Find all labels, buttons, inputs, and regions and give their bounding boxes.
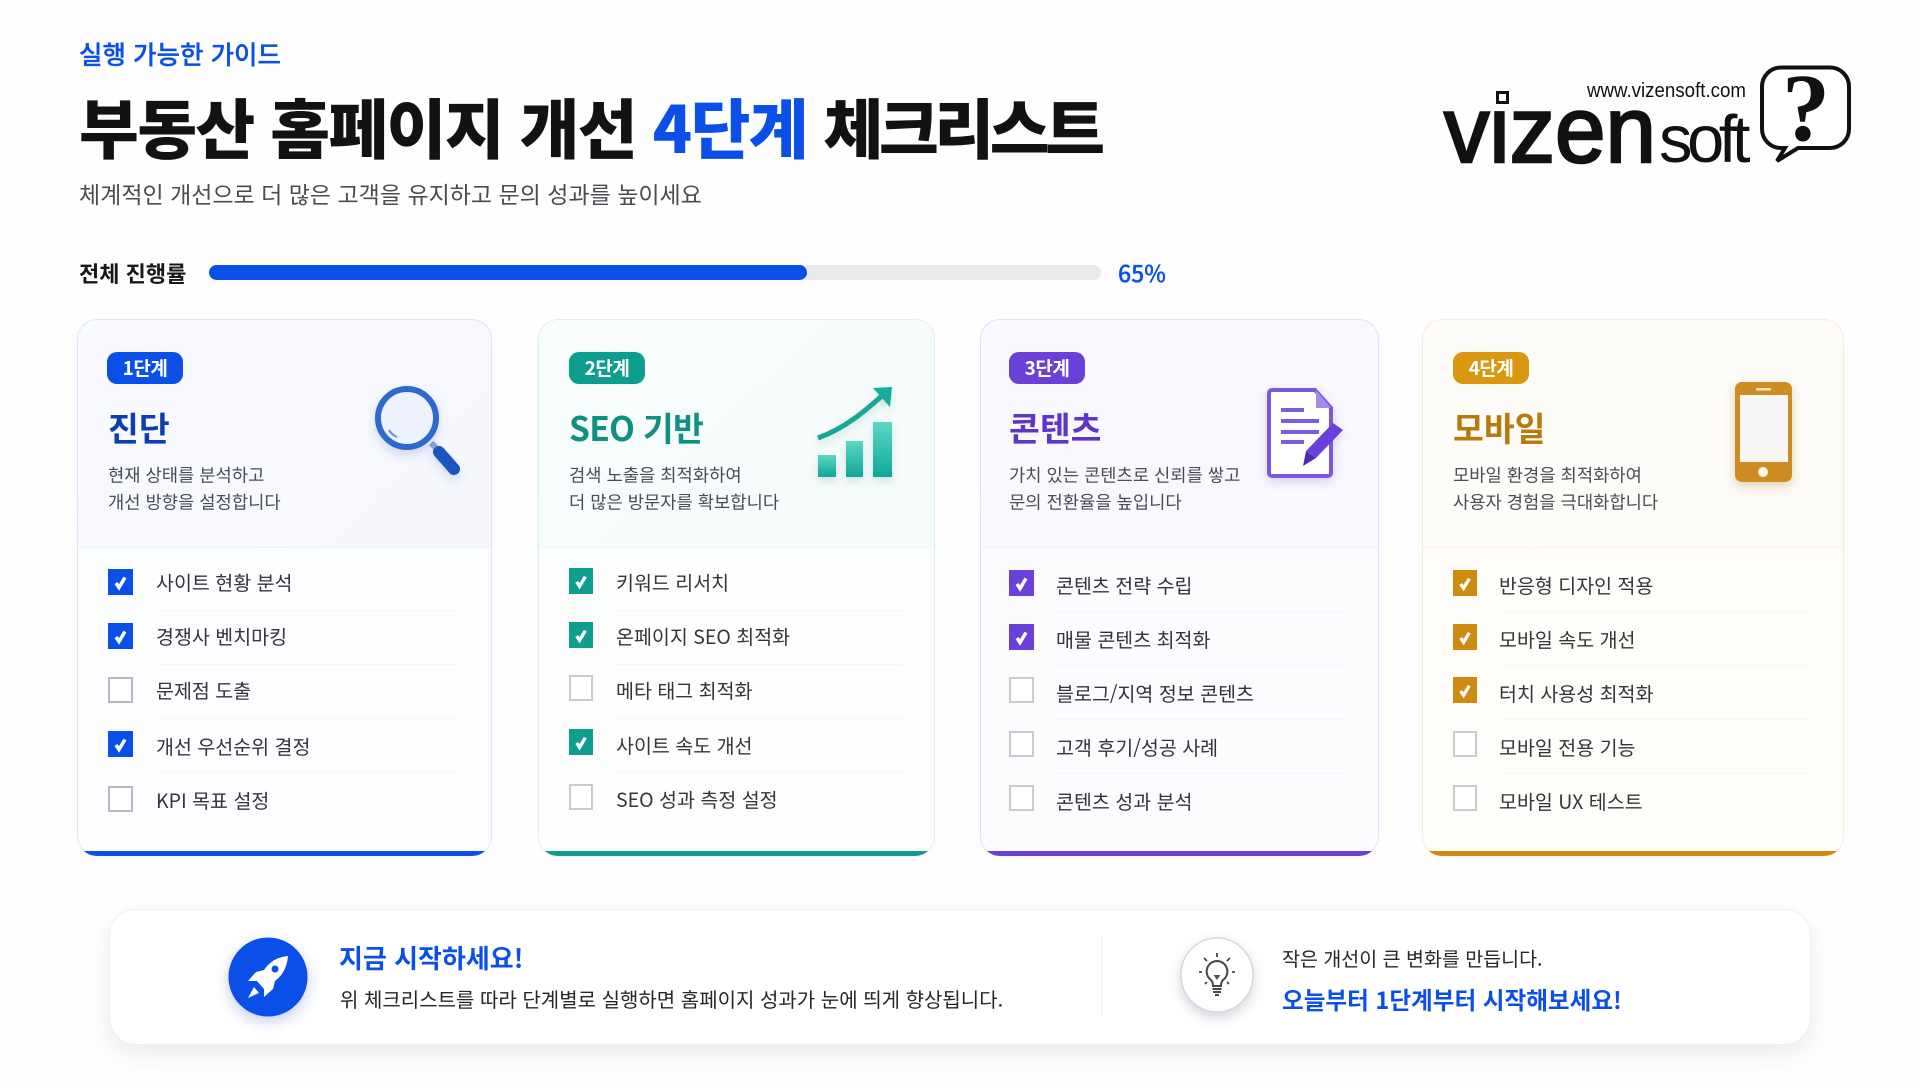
checklist [569, 567, 790, 813]
item 5: KPI 목표 설정 [156, 785, 269, 814]
badge: 1단계 [123, 354, 167, 381]
item 3: 메타 태그 최적화 [616, 675, 753, 704]
badge [107, 352, 183, 384]
callout: bottom banner [110, 910, 1810, 1044]
panel: step 1 diagnosis [77, 319, 492, 856]
description: 모바일 환경을 최적화하여 [1453, 462, 1642, 488]
badge: 2단계 [585, 354, 629, 381]
progress fill [209, 265, 807, 280]
eyebrow: 실행 가능한 가이드 [79, 35, 281, 72]
description: 개선 방향을 설정합니다 [108, 488, 281, 514]
description [1009, 462, 1240, 514]
item 3: 블로그/지역 정보 콘텐츠 [1056, 678, 1254, 707]
item 5: 콘텐츠 성과 분석 [1056, 786, 1193, 815]
item 3: 문제점 도출 [156, 675, 251, 704]
logo: vizensoft: www.vizensoft.com [1586, 80, 1746, 102]
subtitle: 체계적인 개선으로 더 많은 고객을 유지하고 문의 성과를 높이세요 [79, 176, 702, 210]
logo: vizensoft [1442, 55, 1851, 170]
progress value: 65% [1118, 255, 1166, 289]
item 1: 콘텐츠 전략 수립 [1056, 570, 1193, 599]
description: 문의 전환율을 높입니다 [1009, 488, 1182, 514]
item 1: 사이트 현황 분석 [156, 567, 293, 596]
accent strip [540, 851, 933, 856]
checklist [108, 567, 310, 814]
accent strip [1424, 851, 1842, 856]
description: 현재 상태를 분석하고 [108, 462, 264, 488]
item 2: 온페이지 SEO 최적화 [616, 621, 790, 650]
heading: 콘텐츠 [1009, 402, 1101, 450]
checklist [1009, 570, 1254, 815]
heading: 진단 [108, 402, 170, 450]
badge [569, 352, 645, 384]
badge: 4단계 [1469, 354, 1513, 381]
progress track [209, 265, 1101, 280]
checklist [1453, 570, 1812, 815]
title: 부동산 홈페이지 개선 4단계 체크리스트 [79, 78, 1101, 172]
icon: light bulb [1176, 937, 1258, 1022]
item 4: 개선 우선순위 결정 [156, 731, 310, 760]
progress bar [79, 255, 1166, 289]
item 3 [108, 675, 251, 704]
item 3: 터치 사용성 최적화 [1499, 678, 1653, 707]
icon: magnifier [372, 386, 462, 482]
item 4: 고객 후기/성공 사례 [1056, 732, 1218, 761]
accent strip [79, 851, 490, 856]
icon: rocket [222, 936, 314, 1028]
item 2: 매물 콘텐츠 최적화 [1056, 624, 1210, 653]
heading: 모바일 [1453, 402, 1545, 450]
panel: step 3 content [980, 319, 1379, 856]
badge [1453, 352, 1529, 384]
accent strip [982, 851, 1377, 856]
item 1: 반응형 디자인 적용 [1499, 570, 1653, 599]
CTA text: 위 체크리스트를 따라 단계별로 실행하면 홈페이지 성과가 눈에 띄게 향상됩니다. [340, 984, 1003, 1013]
item 5: 모바일 UX 테스트 [1499, 786, 1643, 815]
description [1453, 462, 1658, 514]
badge [1009, 352, 1085, 384]
description: 더 많은 방문자를 확보합니다 [569, 488, 779, 514]
panel: step 4 mobile [1422, 319, 1844, 856]
item 5: SEO 성과 측정 설정 [616, 784, 778, 813]
panel: step 2 SEO [538, 319, 935, 856]
encouragement highlight: 오늘부터 1단계부터 시작해보세요! [1282, 982, 1622, 1016]
heading: SEO 기반 [569, 402, 703, 450]
item 2: 경쟁사 벤치마킹 [156, 621, 287, 650]
CTA heading: 지금 시작하세요! [339, 939, 523, 976]
icon: growth chart [815, 387, 895, 484]
badge: 3단계 [1025, 354, 1069, 381]
description: 가치 있는 콘텐츠로 신뢰를 쌓고 [1009, 462, 1240, 488]
description [108, 462, 281, 514]
icon: document and pencil [1263, 388, 1344, 486]
logo: vizensoft: ? [1782, 55, 1830, 161]
item 1: 키워드 리서치 [616, 567, 729, 596]
description [569, 462, 779, 514]
description: 사용자 경험을 극대화합니다 [1453, 488, 1658, 514]
progress label: 전체 진행률 [79, 257, 186, 289]
item 4: 모바일 전용 기능 [1499, 732, 1636, 761]
description: 검색 노출을 최적화하여 [569, 462, 742, 488]
encouragement line: 작은 개선이 큰 변화를 만듭니다. [1282, 943, 1543, 972]
icon: smartphone [1730, 381, 1797, 491]
item 2: 모바일 속도 개선 [1499, 624, 1636, 653]
item 4: 사이트 속도 개선 [616, 730, 753, 759]
